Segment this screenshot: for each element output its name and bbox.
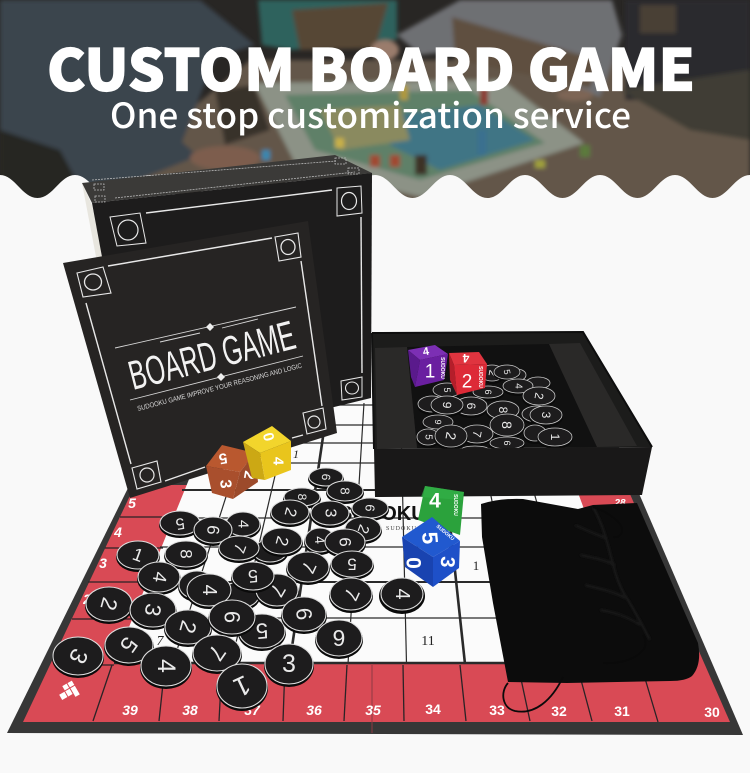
main pile of number tokens: 6 (203, 524, 223, 536)
main pile of number tokens (52, 468, 425, 711)
main pile of number tokens: 3 (282, 650, 296, 678)
board white grid (114, 403, 641, 664)
blue die: 0 (402, 557, 424, 569)
printed clues on grid: 1 (293, 447, 299, 461)
main pile of number tokens: 6 (362, 504, 378, 512)
tray box (372, 332, 652, 449)
main pile of number tokens: 1 (229, 669, 255, 703)
lid top flap (82, 155, 372, 203)
box lid (back) (82, 155, 372, 408)
grid lines (114, 403, 641, 664)
yellow die: 4 (270, 457, 286, 466)
tokens inside tray: 2 (442, 431, 460, 441)
main pile of number tokens: 7 (203, 640, 231, 666)
green die: SUDOKU (452, 494, 458, 516)
title: CUSTOM BOARD GAME (47, 26, 695, 108)
printed clues on grid: 1 (473, 558, 479, 573)
red die: 2 (462, 372, 472, 392)
main pile of number tokens: 8 (295, 494, 309, 501)
black drawstring bag (481, 499, 699, 712)
box lid (front cover) (63, 221, 337, 498)
subtitle: One stop customization service (110, 88, 631, 138)
main pile of number tokens: 7 (229, 541, 249, 555)
brown die: 2 (240, 469, 258, 481)
green die: 4 (429, 490, 441, 512)
board edge numbers: 36 (306, 702, 322, 718)
yellow die: 0 (259, 431, 277, 443)
main pile of number tokens: 7 (339, 584, 363, 604)
main pile of number tokens: 2 (354, 522, 372, 536)
tokens inside tray: 5 (502, 369, 512, 375)
main pile of number tokens: 3 (140, 602, 166, 618)
tokens inside tray: 5 (422, 434, 434, 440)
cover title: BOARD GAME (124, 312, 300, 399)
board edge numbers: 5 (128, 495, 136, 511)
board edge numbers: 28 (613, 498, 626, 509)
board red border (23, 485, 730, 722)
main pile of number tokens: 3 (322, 509, 338, 518)
main pile of number tokens: 2 (95, 595, 123, 613)
purple die: 1 (425, 362, 435, 382)
board edge numbers: 33 (489, 702, 505, 718)
printed sudoku logo: SUDOKU (386, 526, 417, 532)
tray front wall (372, 332, 652, 497)
cover ornaments (115, 307, 303, 400)
main pile of number tokens: 6 (220, 611, 244, 623)
main pile of number tokens: 5 (247, 566, 259, 586)
main pile of number tokens: 4 (234, 520, 252, 528)
board edge numbers: 34 (425, 701, 441, 717)
tokens inside tray: 7 (469, 429, 484, 439)
printed clues on grid: 11 (421, 634, 435, 649)
board edge numbers: 37 (244, 702, 261, 718)
fold line (371, 665, 373, 733)
board logo (56, 681, 80, 703)
tokens inside tray: 6 (483, 389, 493, 395)
tokens inside tray (416, 365, 573, 452)
tokens inside tray: 6 (502, 440, 512, 446)
red border cell lines (55, 517, 658, 722)
header photo: people playing a board game (0, 0, 750, 205)
lid flap printed lines (92, 158, 359, 202)
main pile of number tokens: 5 (255, 618, 269, 644)
board edge numbers: 35 (365, 702, 381, 718)
tokens inside tray: 2 (531, 391, 546, 401)
bag gathered folds (575, 507, 650, 640)
main pile of number tokens: 4 (312, 535, 328, 545)
green die (418, 486, 464, 535)
tokens inside tray: 2 (486, 369, 498, 377)
printed clues on grid (156, 447, 479, 649)
board edge numbers: 2 (82, 591, 91, 607)
tray floor (407, 344, 597, 448)
tokens inside tray: 6 (464, 403, 478, 410)
main pile of number tokens: 8 (338, 487, 352, 495)
board outer frame (7, 403, 743, 735)
tokens inside tray: 3 (539, 412, 553, 419)
board edge numbers: 31 (614, 703, 630, 719)
main pile of number tokens: 7 (265, 580, 289, 600)
main pile of number tokens: 8 (176, 549, 196, 559)
blue die: 5 (417, 531, 443, 545)
tokens inside tray: 9 (433, 419, 443, 425)
red die: SUDOKU (477, 366, 483, 388)
brown die (206, 445, 258, 499)
main pile of number tokens: 2 (281, 505, 299, 519)
wavy white background (0, 175, 750, 773)
tokens inside tray: 8 (499, 421, 515, 429)
board edge numbers: 30 (704, 704, 720, 720)
cover printed frame (77, 233, 326, 489)
main pile of number tokens: 2 (272, 534, 292, 548)
blue die: SUDOKU (435, 524, 456, 543)
blue die (402, 517, 460, 587)
main pile of number tokens: 5 (174, 514, 186, 532)
brown die: 5 (217, 449, 229, 467)
main pile of number tokens: 7 (296, 558, 320, 576)
printed clues on grid: 7 (156, 634, 164, 649)
main pile of number tokens: 4 (152, 659, 180, 673)
board edge numbers (82, 495, 720, 720)
tray right divider (549, 343, 637, 447)
tokens inside tray: 5 (442, 387, 452, 393)
red die (449, 351, 487, 395)
cover tagline: SUDOOKU GAME IMPROVE YOUR REASONING AND LOGIC (137, 363, 303, 413)
main pile of number tokens: 6 (291, 607, 317, 621)
purple die: SUDOKU (439, 357, 445, 379)
blue die: 3 (436, 555, 458, 569)
main pile of number tokens: 3 (63, 644, 93, 668)
lid printed frame (110, 186, 362, 400)
brown die: 3 (216, 479, 234, 489)
main pile of number tokens: 5 (347, 554, 357, 574)
bag drawstring (503, 507, 645, 712)
tokens inside tray: 8 (496, 407, 510, 414)
main pile of number tokens: 6 (333, 625, 345, 651)
red die: 4 (462, 351, 469, 365)
main pile of number tokens: 4 (391, 588, 413, 600)
tokens inside tray: 1 (548, 434, 562, 441)
main pile of number tokens: 4 (198, 584, 220, 596)
tray interior (372, 332, 652, 449)
main pile of number tokens: 6 (319, 473, 333, 481)
main pile of number tokens: 2 (174, 618, 202, 636)
tokens inside tray: 4 (512, 383, 524, 389)
purple die (408, 345, 448, 387)
yellow die (243, 426, 291, 480)
main pile of number tokens: 1 (130, 544, 146, 566)
game board (7, 403, 743, 735)
main pile of number tokens: 4 (148, 570, 170, 584)
board edge numbers: 38 (182, 702, 198, 718)
lid side sliver (82, 183, 104, 262)
main pile of number tokens: 5 (115, 632, 143, 658)
tokens inside tray: 9 (440, 401, 454, 409)
board edge numbers: 32 (551, 703, 567, 719)
purple die: 4 (422, 345, 431, 358)
lid main face (92, 173, 372, 408)
tray left divider (375, 347, 417, 449)
board edge numbers: 39 (122, 702, 138, 718)
board edge numbers: 3 (99, 555, 107, 571)
board edge numbers: 4 (113, 524, 122, 540)
main pile of number tokens: 6 (336, 537, 354, 547)
printed sudoku logo: SUDOKU (339, 503, 426, 525)
